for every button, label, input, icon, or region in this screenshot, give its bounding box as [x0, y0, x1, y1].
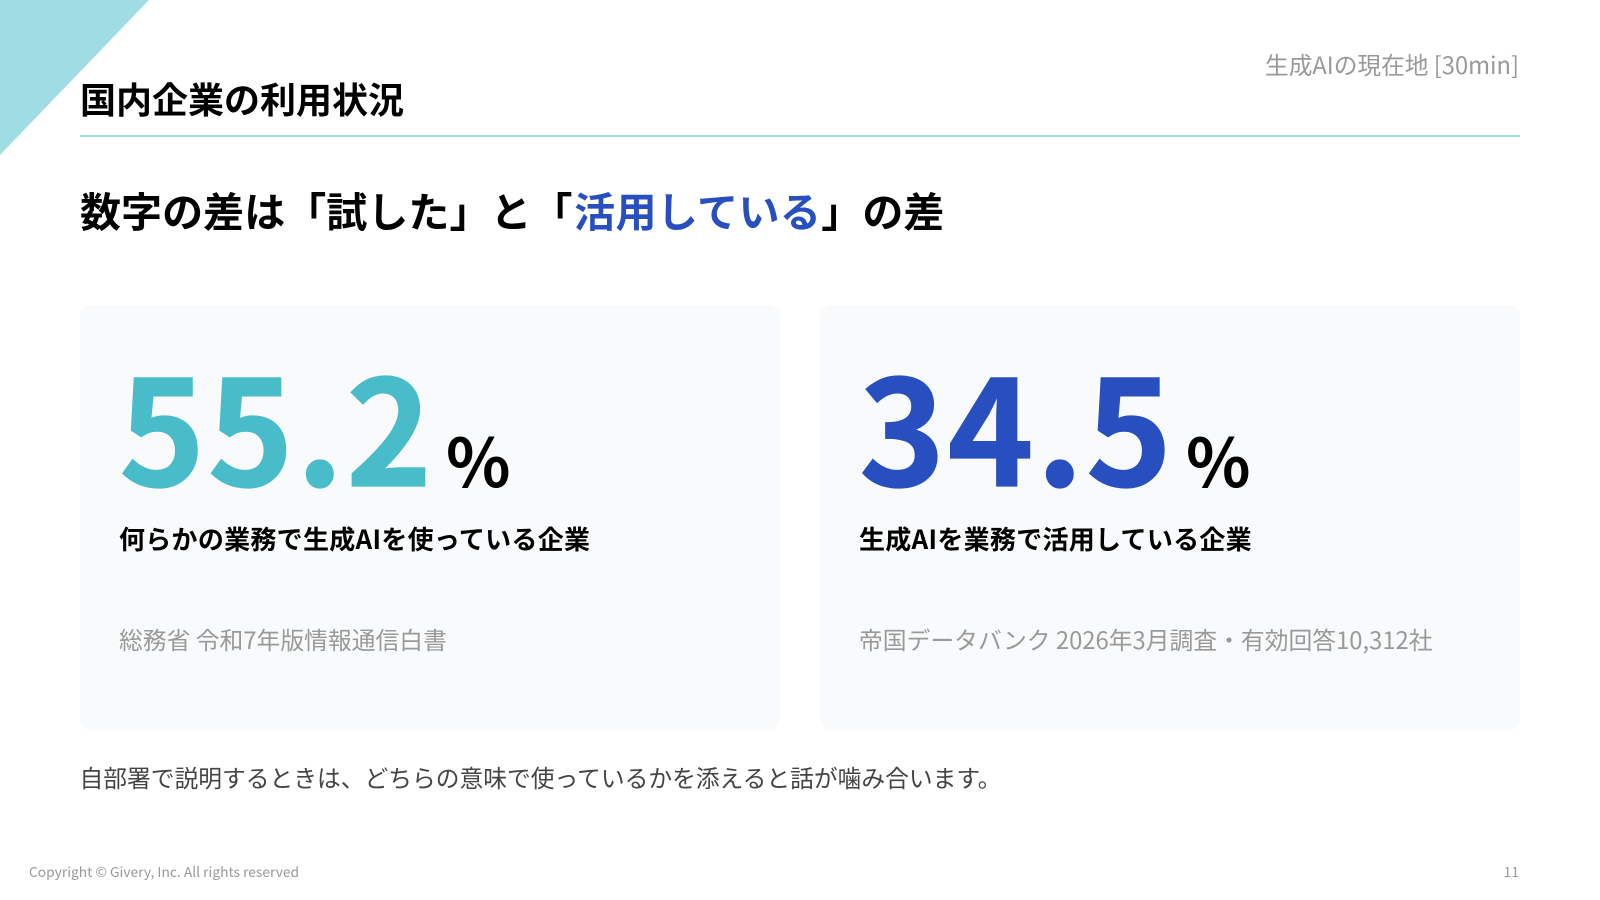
source: 総務省 令和7年版情報通信白書: [119, 621, 447, 656]
stat description: 生成AIを業務で活用している企業: [859, 520, 1252, 557]
main heading: 数字の差は「試した」と「活用している」の差: [80, 179, 944, 239]
takeaway note: 自部署で説明するときは、どちらの意味で使っているかを添えると話が噛み合います。: [80, 759, 1001, 794]
percent sign: %: [1186, 410, 1251, 507]
deck label: 生成AIの現在地 [30min]: [1265, 47, 1519, 81]
stat description: 何らかの業務で生成AIを使っている企業: [119, 520, 590, 557]
section title: 国内企業の利用状況: [80, 72, 404, 124]
page number: 11: [1504, 861, 1519, 881]
stat value 55.2: 55.2: [119, 318, 434, 529]
percent sign: %: [446, 410, 511, 507]
panel: 34.5% stat: [820, 305, 1520, 730]
source: 帝国データバンク 2026年3月調査・有効回答10,312社: [859, 621, 1433, 656]
corner triangle: [0, 0, 149, 155]
stat value 34.5: 34.5: [859, 318, 1174, 529]
panel: 55.2% stat: [80, 305, 780, 730]
copyright: Copyright © Givery, Inc. All rights reserved: [29, 861, 299, 881]
